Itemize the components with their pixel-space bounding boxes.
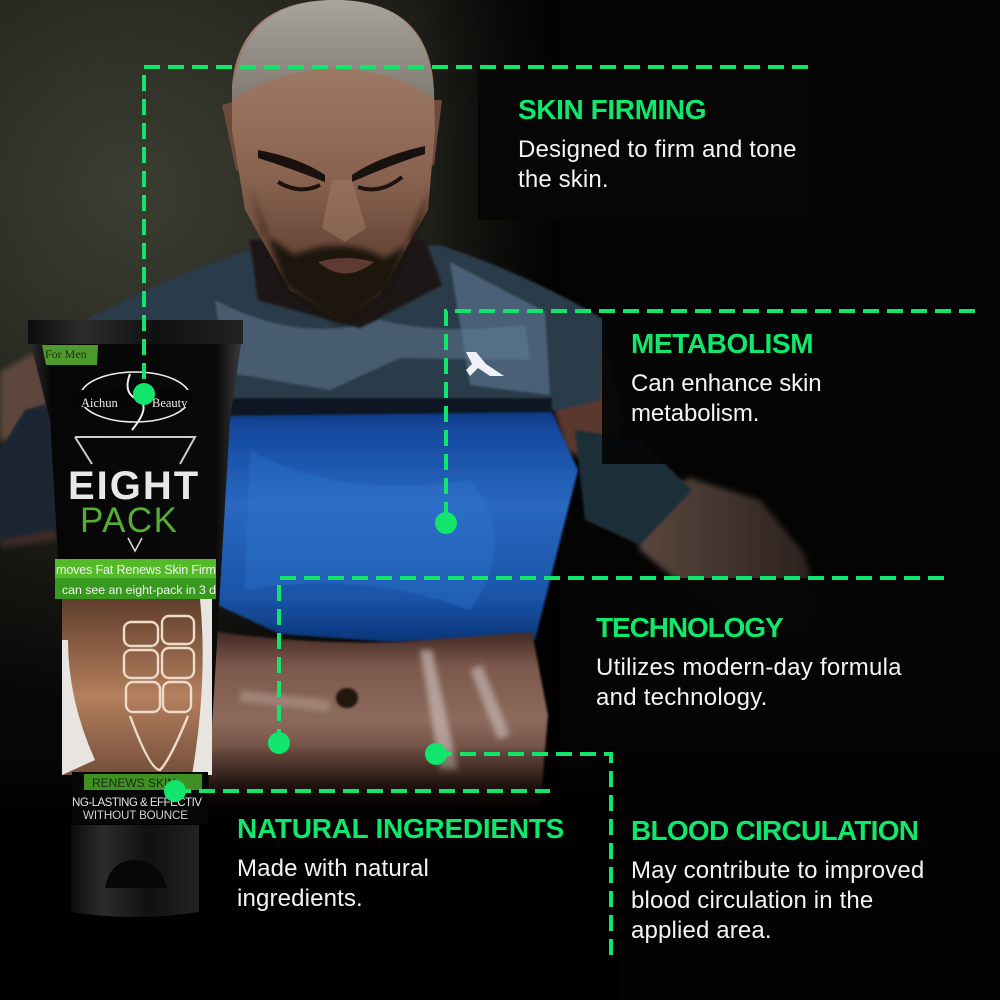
green band: moves Fat Renews Skin Firm (56, 563, 216, 577)
belly (200, 630, 548, 810)
callout: natural ingredients (237, 813, 564, 912)
callout: metabolism (631, 328, 822, 427)
text (237, 855, 429, 912)
callout: blood circulation (631, 815, 924, 944)
sauna shirt (213, 412, 578, 642)
text: May contribute to improved (631, 857, 924, 884)
product name: EIGHT (68, 464, 200, 508)
text: the skin. (518, 166, 609, 193)
text: Made with natural (237, 855, 429, 882)
heading: TECHNOLOGY (596, 612, 783, 643)
callout: technology (596, 612, 902, 711)
brand logo (78, 372, 192, 430)
callout: skin firming (518, 94, 797, 193)
text (518, 136, 797, 193)
text: Utilizes modern-day formula (596, 654, 902, 681)
head (222, 0, 442, 328)
green band (55, 559, 216, 599)
tag: for men: For Men (45, 347, 87, 361)
text: Can enhance skin (631, 370, 822, 397)
connector: metabolism (435, 311, 975, 534)
text: ingredients. (237, 885, 363, 912)
lower label: WITHOUT BOUNCE (83, 809, 188, 822)
shirt sleeves and chest (0, 245, 692, 545)
tube cap top (28, 320, 243, 344)
connector: natural ingredients (164, 780, 550, 802)
brand logo: Aichun (81, 396, 119, 410)
heading: SKIN FIRMING (518, 94, 706, 125)
tag: for men (42, 345, 98, 365)
text: Designed to firm and tone (518, 136, 797, 163)
heading: NATURAL INGREDIENTS (237, 813, 564, 844)
navel (336, 688, 358, 708)
connector: skin firming (133, 67, 808, 405)
logo on shirt (466, 352, 504, 376)
green band: can see an eight-pack in 3 d (62, 583, 216, 597)
lower label (72, 772, 208, 824)
tube body (31, 344, 241, 917)
arms (0, 335, 820, 640)
text (631, 857, 924, 944)
lower label: RENEWS SKIN (92, 776, 176, 790)
connector: blood circulation (425, 743, 611, 958)
text: and technology. (596, 684, 768, 711)
brand logo: Beauty (152, 396, 188, 410)
tube body: PACK (80, 501, 178, 540)
heading: METABOLISM (631, 328, 813, 359)
fades (0, 745, 1000, 820)
text: metabolism. (631, 400, 759, 427)
lower label: NG-LASTING & EFFECTIV (72, 796, 202, 809)
text: applied area. (631, 917, 772, 944)
heading: BLOOD CIRCULATION (631, 815, 918, 846)
abs picture (62, 599, 212, 775)
text (596, 654, 902, 711)
dark text boxes (478, 66, 810, 220)
text (631, 370, 822, 427)
text: blood circulation in the (631, 887, 873, 914)
connector: technology (268, 578, 944, 754)
tube cap bottom (71, 825, 199, 917)
